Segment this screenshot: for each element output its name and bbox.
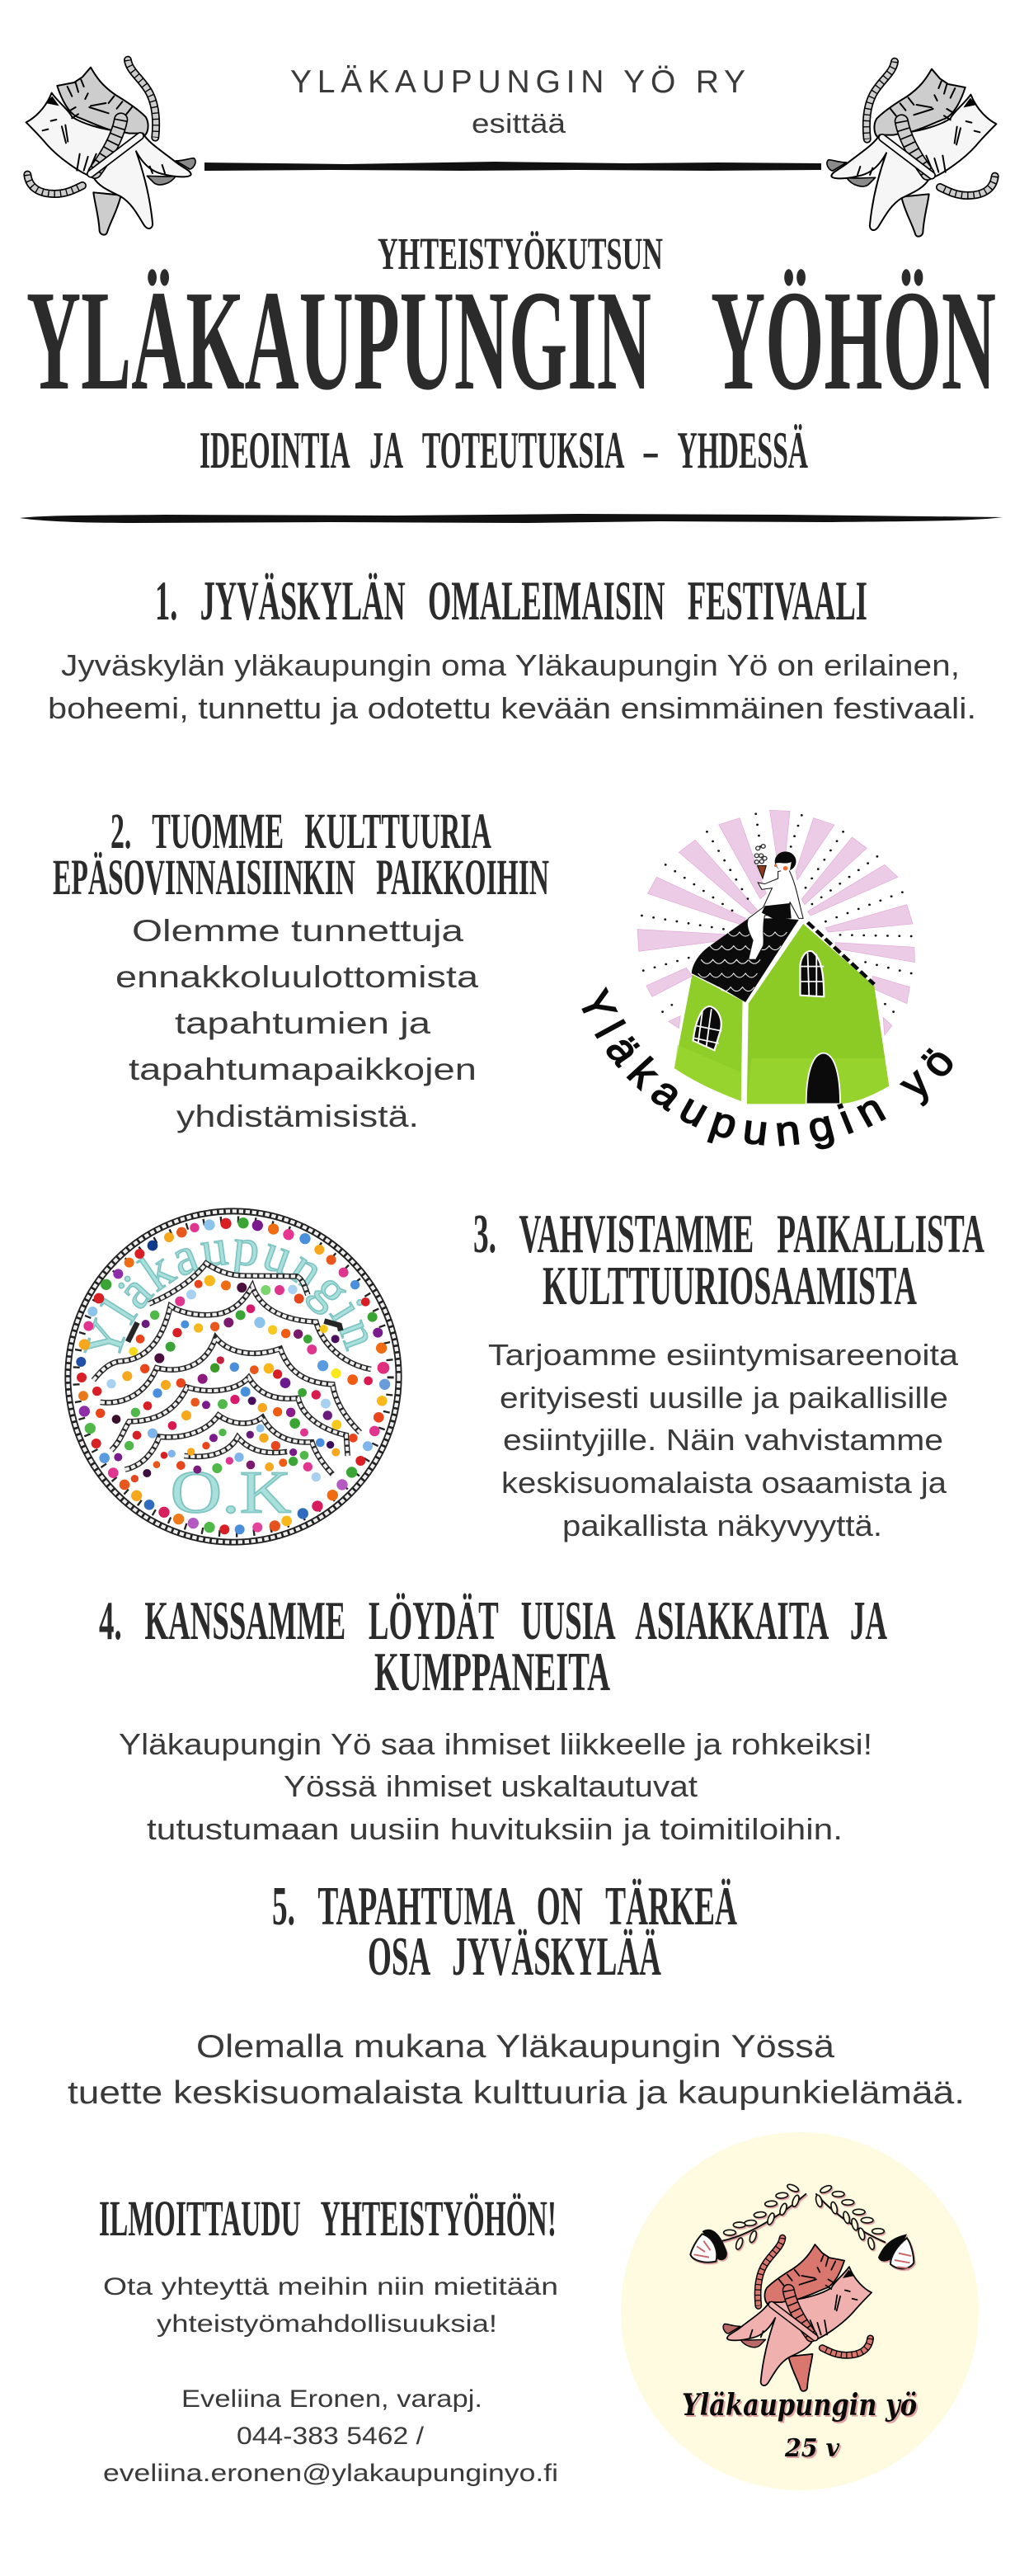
text block 3: Tarjoamme esiintymisareenoita — [488, 1338, 959, 1372]
text block 4: Yössä ihmiset uskaltautuvat — [284, 1769, 698, 1803]
badge background — [621, 2132, 979, 2490]
dotted rays — [641, 814, 911, 1012]
figure on roof — [747, 869, 803, 959]
badge lettering: 25 v — [784, 2434, 840, 2463]
contact text: Ota yhteyttä meihin niin mietitään — [103, 2273, 558, 2301]
contact text: Eveliina Eronen, varapj. — [181, 2385, 482, 2413]
logo: string lights circle — [64, 1208, 402, 1546]
icon: hugging cats right — [827, 62, 996, 237]
text block 3: keskisuomalaista osaamista ja — [501, 1466, 947, 1500]
text block 3: esiintyjille. Näin vahvistamme — [503, 1423, 943, 1457]
text block 1: boheemi, tunnettu ja odotettu kevään ensimmäinen festivaali. — [48, 691, 976, 725]
contact text: eveliina.eronen@ylakaupunginyo.fi — [103, 2460, 558, 2487]
organisation name: YLÄKAUPUNGIN YÖ RY — [290, 64, 745, 100]
heading 5: OSA JYVÄSKYLÄÄ — [368, 1926, 661, 1987]
presents: esittää — [472, 108, 566, 139]
heading 3 — [473, 1203, 984, 1316]
heading 4 — [99, 1590, 887, 1702]
heading 2 — [53, 804, 549, 906]
logo: green house with figure: Yläkaupungin yö — [581, 987, 953, 1150]
heading 4: KUMPPANEITA — [374, 1641, 610, 1702]
subtitle: invitation: YHTEISTYÖKUTSUN — [378, 228, 663, 279]
windows — [801, 951, 824, 996]
text block 2: tapahtumapaikkojen — [129, 1053, 477, 1086]
text block 2 — [115, 914, 479, 1133]
icon: hugging cats left — [26, 60, 195, 235]
heading 2: EPÄSOVINNAISIINKIN PAIKKOIHIN — [53, 850, 549, 906]
heading 2: 2. TUOMME KULTTUURIA — [110, 804, 491, 859]
text block 3: erityisesti uusille ja paikallisille — [500, 1381, 948, 1415]
badge lettering — [682, 2388, 917, 2463]
text block 2: tapahtumien ja — [175, 1006, 431, 1040]
text block 2: ennakkoluulottomista — [115, 960, 479, 994]
text block 1: Jyväskylän yläkaupungin oma Yläkaupungin Yö on erilainen, — [61, 648, 960, 682]
inner bulbs — [92, 1275, 373, 1482]
house walls — [674, 975, 743, 1101]
rope ring — [68, 1211, 399, 1542]
door — [806, 1053, 840, 1104]
text block 1 — [48, 648, 976, 725]
text block 3: paikallista näkyvyyttä. — [562, 1509, 882, 1542]
text block 4: tutustumaan uusiin huvituksiin ja toimitiloihin. — [147, 1812, 843, 1846]
text block 4: Yläkaupungin Yö saa ihmiset liikkeelle ja rohkeiksi! — [119, 1727, 872, 1761]
sun rays — [637, 810, 914, 1035]
contact text: 044-383 5462 / — [237, 2423, 425, 2450]
call to action heading: ILMOITTAUDU YHTEISTYÖHÖN! — [99, 2192, 557, 2247]
laurel branches and flowers — [690, 2183, 914, 2268]
text block 5: Olemalla mukana Yläkaupungin Yössä — [196, 2029, 834, 2065]
badge: 25 year anniversary — [621, 2132, 979, 2490]
text block 4 — [119, 1727, 872, 1846]
logo: string lights circle: O.K — [171, 1458, 291, 1525]
outer bulbs — [76, 1217, 390, 1534]
contact text — [103, 2273, 558, 2487]
inner light strings — [93, 1264, 371, 1474]
badge lettering: Yläkaupungin yö — [682, 2388, 917, 2423]
divider top — [204, 162, 821, 171]
logo lettering — [578, 998, 988, 1145]
divider lower — [20, 514, 1003, 523]
contact text: yhteistyömahdollisuuksia! — [157, 2310, 497, 2338]
lettering — [118, 1264, 346, 1363]
cats hugging — [723, 2238, 872, 2391]
text block 2: Olemme tunnettuja — [132, 914, 464, 948]
text block 5: tuette keskisuomalaista kulttuuria ja kaupunkielämää. — [68, 2075, 965, 2111]
logo: string lights circle: Yläkaupungin — [83, 1239, 368, 1354]
text block 2: yhdistämisistä. — [176, 1100, 419, 1133]
heading 5 — [272, 1876, 737, 1987]
logo: green house with figure — [581, 810, 953, 1150]
text block 5 — [68, 2029, 965, 2111]
text block 3 — [488, 1338, 959, 1542]
roof — [692, 918, 799, 1002]
